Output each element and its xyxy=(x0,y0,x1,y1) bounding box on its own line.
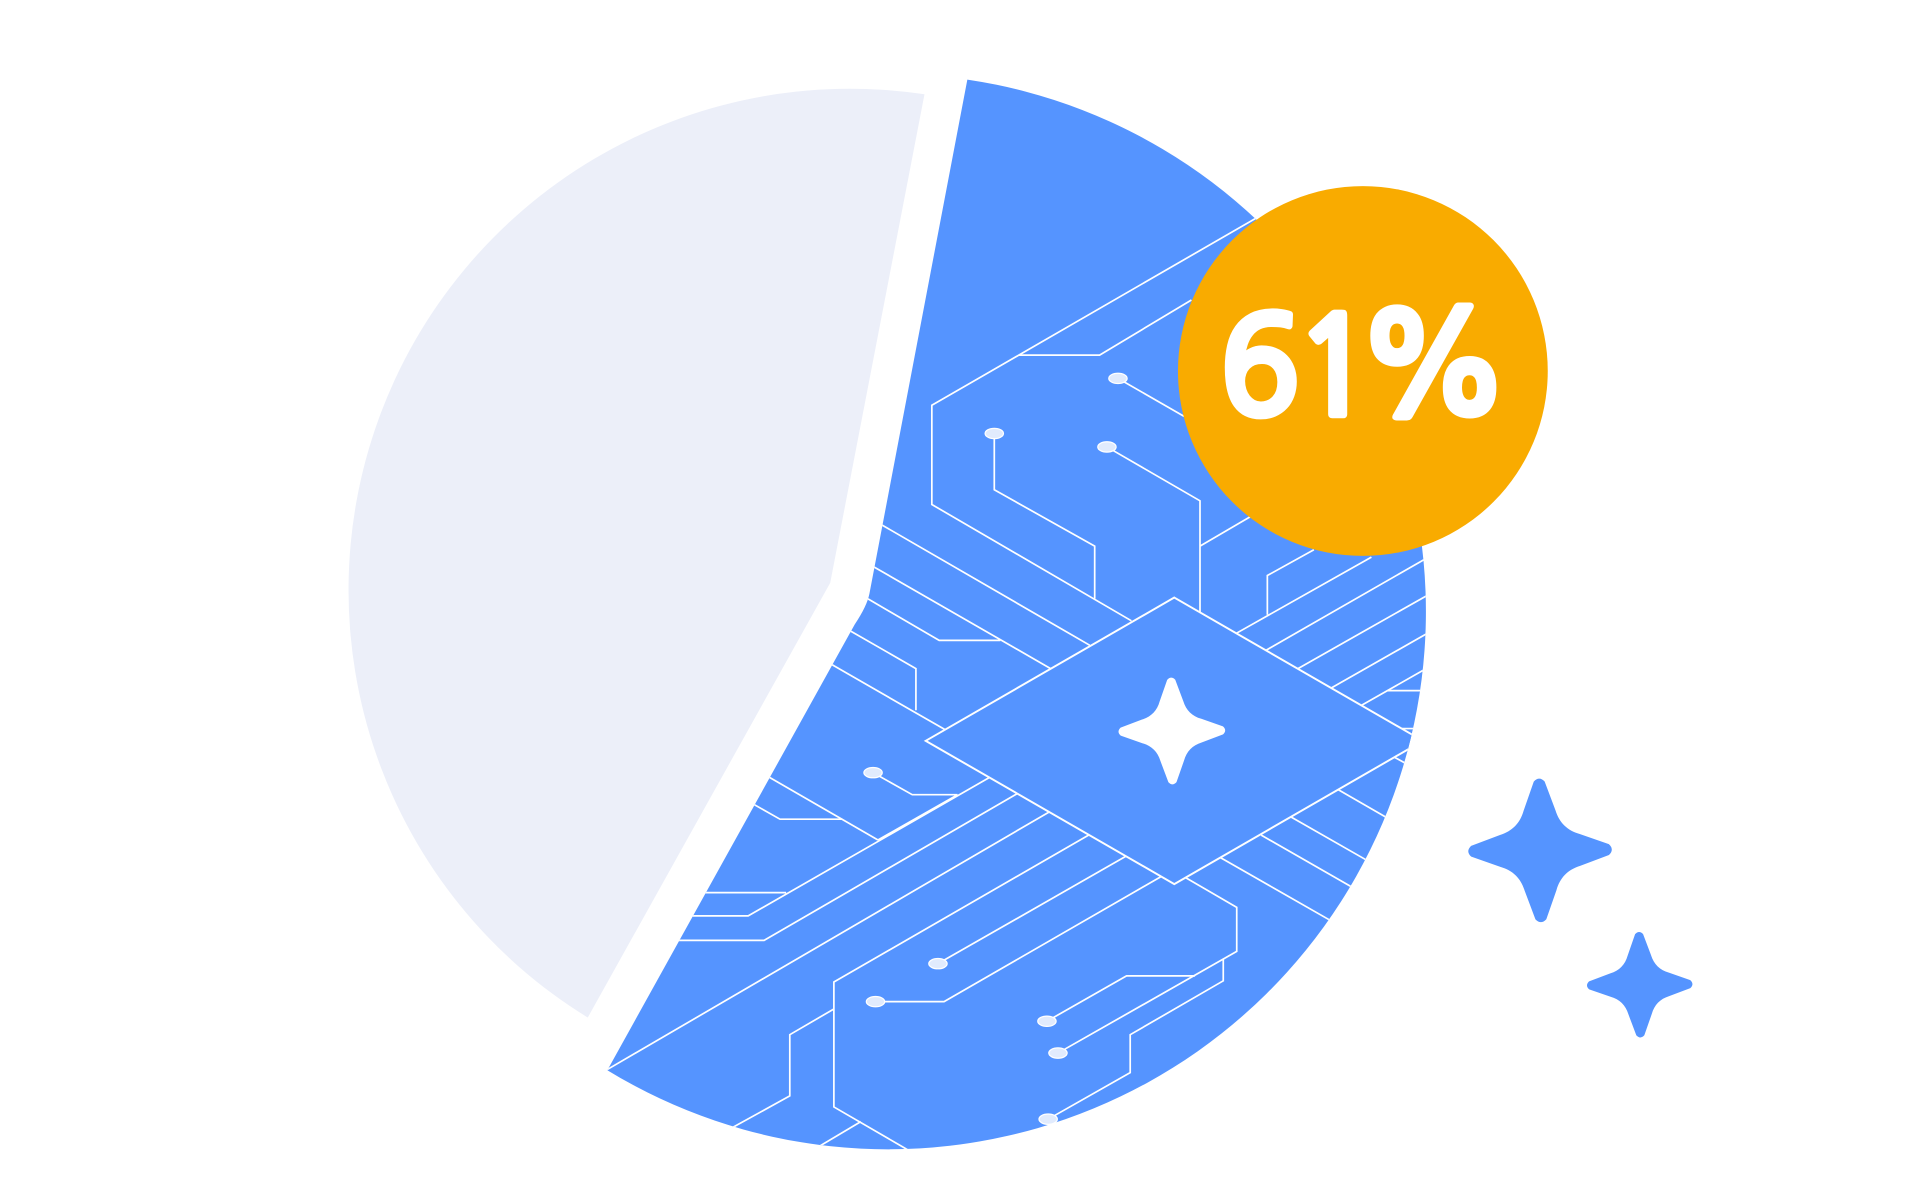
percentage value: 1 xyxy=(1293,302,1376,437)
pie slice: remaining share xyxy=(349,89,924,1018)
circuit nodes xyxy=(864,373,1127,1124)
icon: large sparkle xyxy=(1467,778,1613,923)
orange circle xyxy=(1178,186,1548,556)
icon: small sparkle xyxy=(1586,931,1693,1038)
circuit chip xyxy=(926,598,1423,884)
percentage value: % xyxy=(1357,298,1510,437)
blue slice background xyxy=(607,80,1426,1149)
percentage value: 6 xyxy=(1218,302,1301,437)
percentage badge xyxy=(1178,186,1548,556)
pie slice: 61 percent with circuit pattern xyxy=(606,80,1428,1151)
pie chart infographic xyxy=(348,80,1692,1150)
icon: sparkle on chip xyxy=(1118,677,1226,785)
circuit board traces xyxy=(606,218,1428,1151)
